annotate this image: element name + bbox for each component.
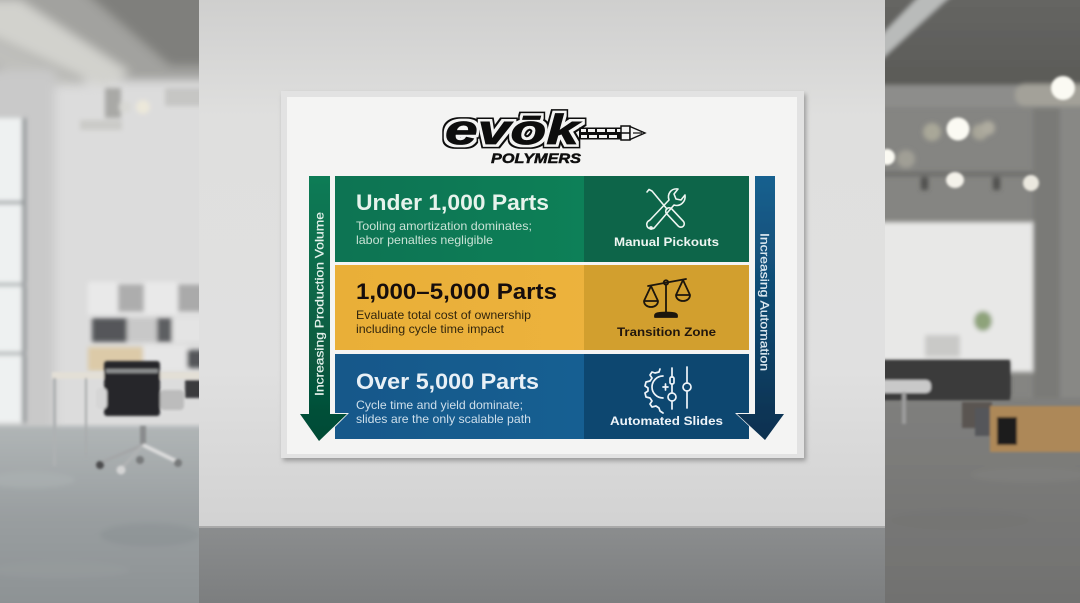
description <box>356 308 531 336</box>
logo wordmark: evōk <box>445 106 583 153</box>
tier: under 1,000 parts <box>335 176 749 262</box>
background: blurred office left <box>0 0 220 603</box>
tier: over 5,000 parts <box>335 354 749 439</box>
description: Evaluate total cost of ownership <box>356 308 531 322</box>
icon: crossed tools <box>647 189 686 229</box>
logo: evok polymers <box>445 106 645 166</box>
poster frame <box>281 91 804 458</box>
poster frame shadow <box>283 94 806 461</box>
description <box>356 398 531 426</box>
arrow label: Increasing Production Volume <box>312 212 326 396</box>
label: Automated Slides <box>610 414 723 428</box>
wall panel <box>199 0 885 528</box>
description: labor penalties negligible <box>356 233 493 247</box>
label: Transition Zone <box>617 325 716 339</box>
heading: Under 1,000 Parts <box>356 190 549 215</box>
description: Tooling amortization dominates; <box>356 219 532 233</box>
label: Manual Pickouts <box>614 235 719 249</box>
logo subtitle: POLYMERS <box>491 150 582 166</box>
description: slides are the only scalable path <box>356 412 531 426</box>
tier: 1,000–5,000 parts <box>335 265 749 350</box>
background: blurred office right <box>875 0 1080 603</box>
icon: screw <box>579 126 645 140</box>
description: including cycle time impact <box>356 322 505 336</box>
description <box>356 219 532 247</box>
poster sheet <box>287 97 797 454</box>
poster <box>281 91 804 458</box>
heading: 1,000–5,000 Parts <box>356 279 557 304</box>
left arrow: increasing production volume <box>298 176 349 441</box>
heading: Over 5,000 Parts <box>356 369 539 394</box>
icon: balance scale <box>644 279 690 317</box>
right arrow: increasing automation <box>735 176 784 441</box>
floor in front of wall <box>199 527 885 603</box>
arrow label: Increasing Automation <box>758 233 772 371</box>
icon: gear and sliders <box>645 367 691 413</box>
description: Cycle time and yield dominate; <box>356 398 523 412</box>
